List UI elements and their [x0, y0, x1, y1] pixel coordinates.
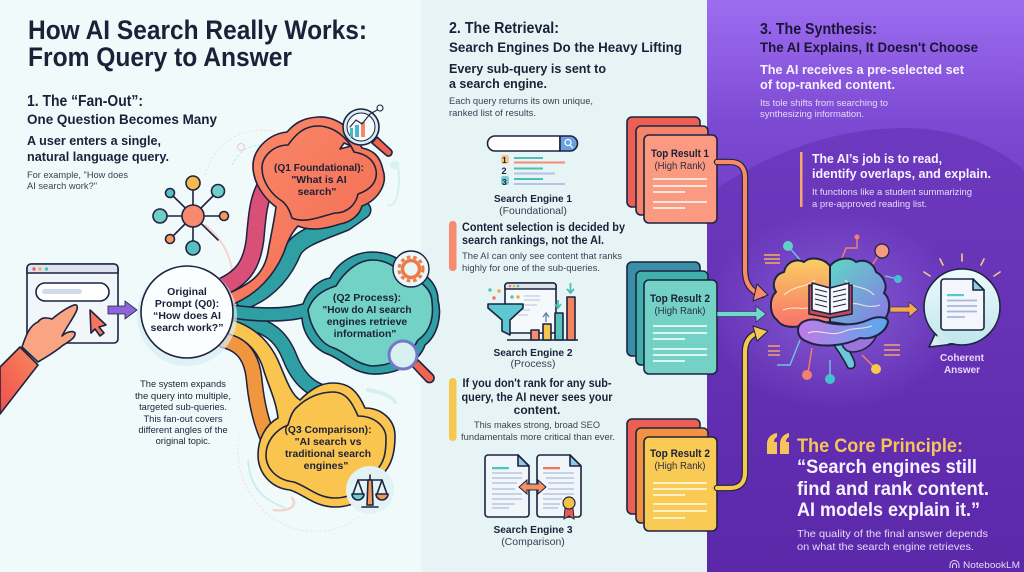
label: search engine 2 [494, 347, 573, 370]
section 3 heading and intro: The AI Explains, It Doesn't Choose [760, 39, 978, 55]
label: search engine 1: Search Engine 1 [494, 193, 572, 205]
section 1 heading and intro: AI search work?" [27, 181, 97, 192]
circle: original prompt: “How does AI [153, 310, 221, 322]
label: search engine 2: (Process) [511, 358, 555, 370]
core principle quote: AI models explain it.” [797, 500, 980, 521]
section 3 heading and intro: Its tole shifts from searching to [760, 98, 888, 109]
label: coherent answer: Coherent [940, 353, 985, 364]
core principle quote: The Core Principle: [797, 436, 963, 457]
callout: content selection: search rankings, not the AI. [462, 233, 604, 247]
card stack: top result 2 yellow: (High Rank) [654, 461, 706, 472]
label: search engine 3: Search Engine 3 [494, 524, 573, 536]
card stack: top result 2 teal [627, 262, 717, 374]
core principle quote: find and rank content. [797, 479, 989, 500]
icon: hand pointing [0, 305, 77, 414]
label: search engine 3 [494, 524, 573, 548]
core principle quote: The quality of the final answer depends [797, 528, 988, 540]
text: system expands: different angles of the [138, 425, 228, 435]
text: system expands [135, 379, 231, 446]
callout: the AI's job: The AI’s job is to read, [812, 151, 942, 166]
cloud: Q1 foundational: search" [298, 186, 336, 198]
icon: gear [393, 251, 429, 287]
section 3 heading and intro: of top-ranked content. [760, 77, 895, 92]
decorative trails [205, 130, 400, 531]
label: search engine 3: (Comparison) [501, 536, 565, 548]
callout: if you don't rank [449, 376, 615, 443]
panel: retrieval background [421, 0, 707, 572]
fan-out tails behind clouds [224, 186, 362, 438]
card stack: top result 1: Top Result 1 [651, 148, 709, 160]
section 1 heading and intro: For example, "How does [27, 170, 128, 181]
arrow: brain to answer [890, 302, 918, 317]
section 2 heading and intro: a search engine. [449, 76, 547, 91]
section 3 heading and intro: synthesizing information. [760, 109, 864, 120]
section 2 heading and intro [449, 20, 682, 119]
section 3 heading and intro [760, 21, 978, 120]
section 1 heading and intro: A user enters a single, [27, 133, 161, 148]
label: coherent answer [940, 353, 985, 376]
callout: the AI's job: identify overlaps, and explain. [812, 166, 991, 181]
cloud: Q3 comparison [228, 320, 395, 507]
circle: original prompt: Prompt (Q0): [155, 298, 219, 310]
callout: the AI's job [800, 151, 991, 210]
callout: the AI's job: a pre-approved reading list. [812, 199, 927, 210]
icon: search engine 1: 2 [502, 166, 507, 176]
arrow: result 1 to brain [717, 162, 768, 301]
text: system expands: targeted sub-queries. [139, 402, 227, 412]
icon: magnifier with chart [340, 105, 392, 156]
core principle quote: on what the search engine retrieves. [797, 541, 974, 553]
icon: quotation marks [767, 433, 789, 454]
arrow: prompt into circle [108, 301, 137, 319]
callout: content selection: Content selection is decided by [462, 220, 625, 234]
callout: the AI's job: It functions like a student summarizing [812, 187, 972, 198]
icon: brain [764, 234, 902, 384]
cloud: Q3 comparison: traditional search [285, 448, 371, 460]
section 2 heading and intro: Search Engines Do the Heavy Lifting [449, 40, 682, 55]
icon: search engine 3 documents [485, 455, 581, 519]
cloud: Q2 process: "How do AI search [322, 304, 412, 316]
core principle quote: “Search engines still [797, 457, 977, 478]
icon: network [153, 176, 228, 255]
icon: search engine 1: 1 [502, 155, 507, 165]
section 2 heading and intro: ranked list of results. [449, 108, 536, 119]
label: search engine 1 [494, 193, 572, 217]
callout: if you don't rank: content. [514, 403, 560, 417]
callout: if you don't rank: fundamentals more critical than ever. [461, 432, 615, 443]
card stack: top result 2 teal: (High Rank) [654, 306, 706, 317]
section 3 heading and intro: The AI receives a pre-selected set [760, 62, 965, 77]
callout: if you don't rank: If you don't rank for any sub- [462, 376, 612, 390]
section 1 heading and intro: One Question Becomes Many [27, 111, 217, 127]
icon: search engine 2 funnel and bars [488, 283, 578, 340]
cloud: Q2 process: (Q2 Process): [333, 292, 401, 304]
label: coherent answer: Answer [944, 365, 980, 376]
cloud: Q1 foundational: (Q1 Foundational): [274, 162, 364, 174]
panel: fan-out background [0, 0, 421, 572]
cloud: Q2 process: engines retrieve [327, 316, 407, 328]
callout: content selection: highly for one of the sub-queries. [462, 263, 600, 274]
text: system expands: This fan-out covers [143, 414, 223, 424]
circle: original prompt: Original [167, 286, 207, 298]
card stack: top result 2 yellow: Top Result 2 [650, 448, 710, 460]
cloud: Q2 process: information" [334, 328, 396, 340]
cloud: Q1 foundational: "What is AI [291, 174, 347, 186]
core principle quote [797, 436, 989, 553]
circle: original prompt [137, 266, 237, 366]
title: From Query to Answer [28, 42, 292, 72]
label: search engine 2: Search Engine 2 [494, 347, 573, 359]
logo: NotebookLM: NotebookLM [963, 560, 1020, 571]
cloud: Q3 comparison: "AI search vs [295, 436, 362, 448]
callout: if you don't rank: query, the AI never sees your [462, 390, 613, 404]
section 2 heading and intro: 2. The Retrieval: [449, 20, 559, 37]
text: system expands: the query into multiple, [135, 391, 231, 401]
cloud: Q2 process [232, 252, 439, 374]
cloud: Q3 comparison: engines" [304, 460, 348, 472]
arrow: result 2 to brain [717, 306, 766, 322]
label: search engine 1: (Foundational) [499, 205, 567, 217]
icon: search engine 1: 3 [502, 177, 507, 187]
section 1 heading and intro: 1. The “Fan-Out”: [27, 93, 143, 110]
cloud: Q3 comparison: (Q3 Comparison): [284, 424, 372, 436]
callout: content selection [449, 220, 625, 274]
icon: cursor [90, 310, 106, 336]
icon: answer speech bubble [924, 254, 1000, 347]
title: How AI Search Really Works: [28, 15, 367, 45]
callout: content selection: The AI can only see content that ranks [462, 251, 622, 262]
circle: original prompt: search work?” [151, 322, 223, 334]
browser window [27, 264, 118, 343]
cloud: Q1 foundational [222, 117, 384, 306]
section 2 heading and intro: Every sub-query is sent to [449, 61, 606, 76]
section 1 heading and intro [27, 93, 217, 192]
section 2 heading and intro: Each query returns its own unique, [449, 96, 593, 107]
card stack: top result 2 teal: Top Result 2 [650, 293, 710, 305]
text: system expands: original topic. [156, 436, 210, 446]
card stack: top result 1 [627, 117, 717, 223]
arrow: result 3 to brain [717, 326, 768, 488]
text: system expands: The system expands [140, 379, 226, 389]
section 3 heading and intro: 3. The Synthesis: [760, 21, 877, 38]
icon: search engine 1 [488, 136, 578, 187]
icon: magnifier [389, 341, 434, 383]
card stack: top result 2 yellow [627, 419, 717, 531]
title [28, 15, 367, 72]
section 1 heading and intro: natural language query. [27, 149, 169, 164]
panel: synthesis background [705, 0, 1024, 572]
icon: scales [346, 466, 394, 514]
card stack: top result 1: (High Rank) [654, 161, 706, 172]
callout: if you don't rank: This makes strong, broad SEO [474, 420, 600, 431]
